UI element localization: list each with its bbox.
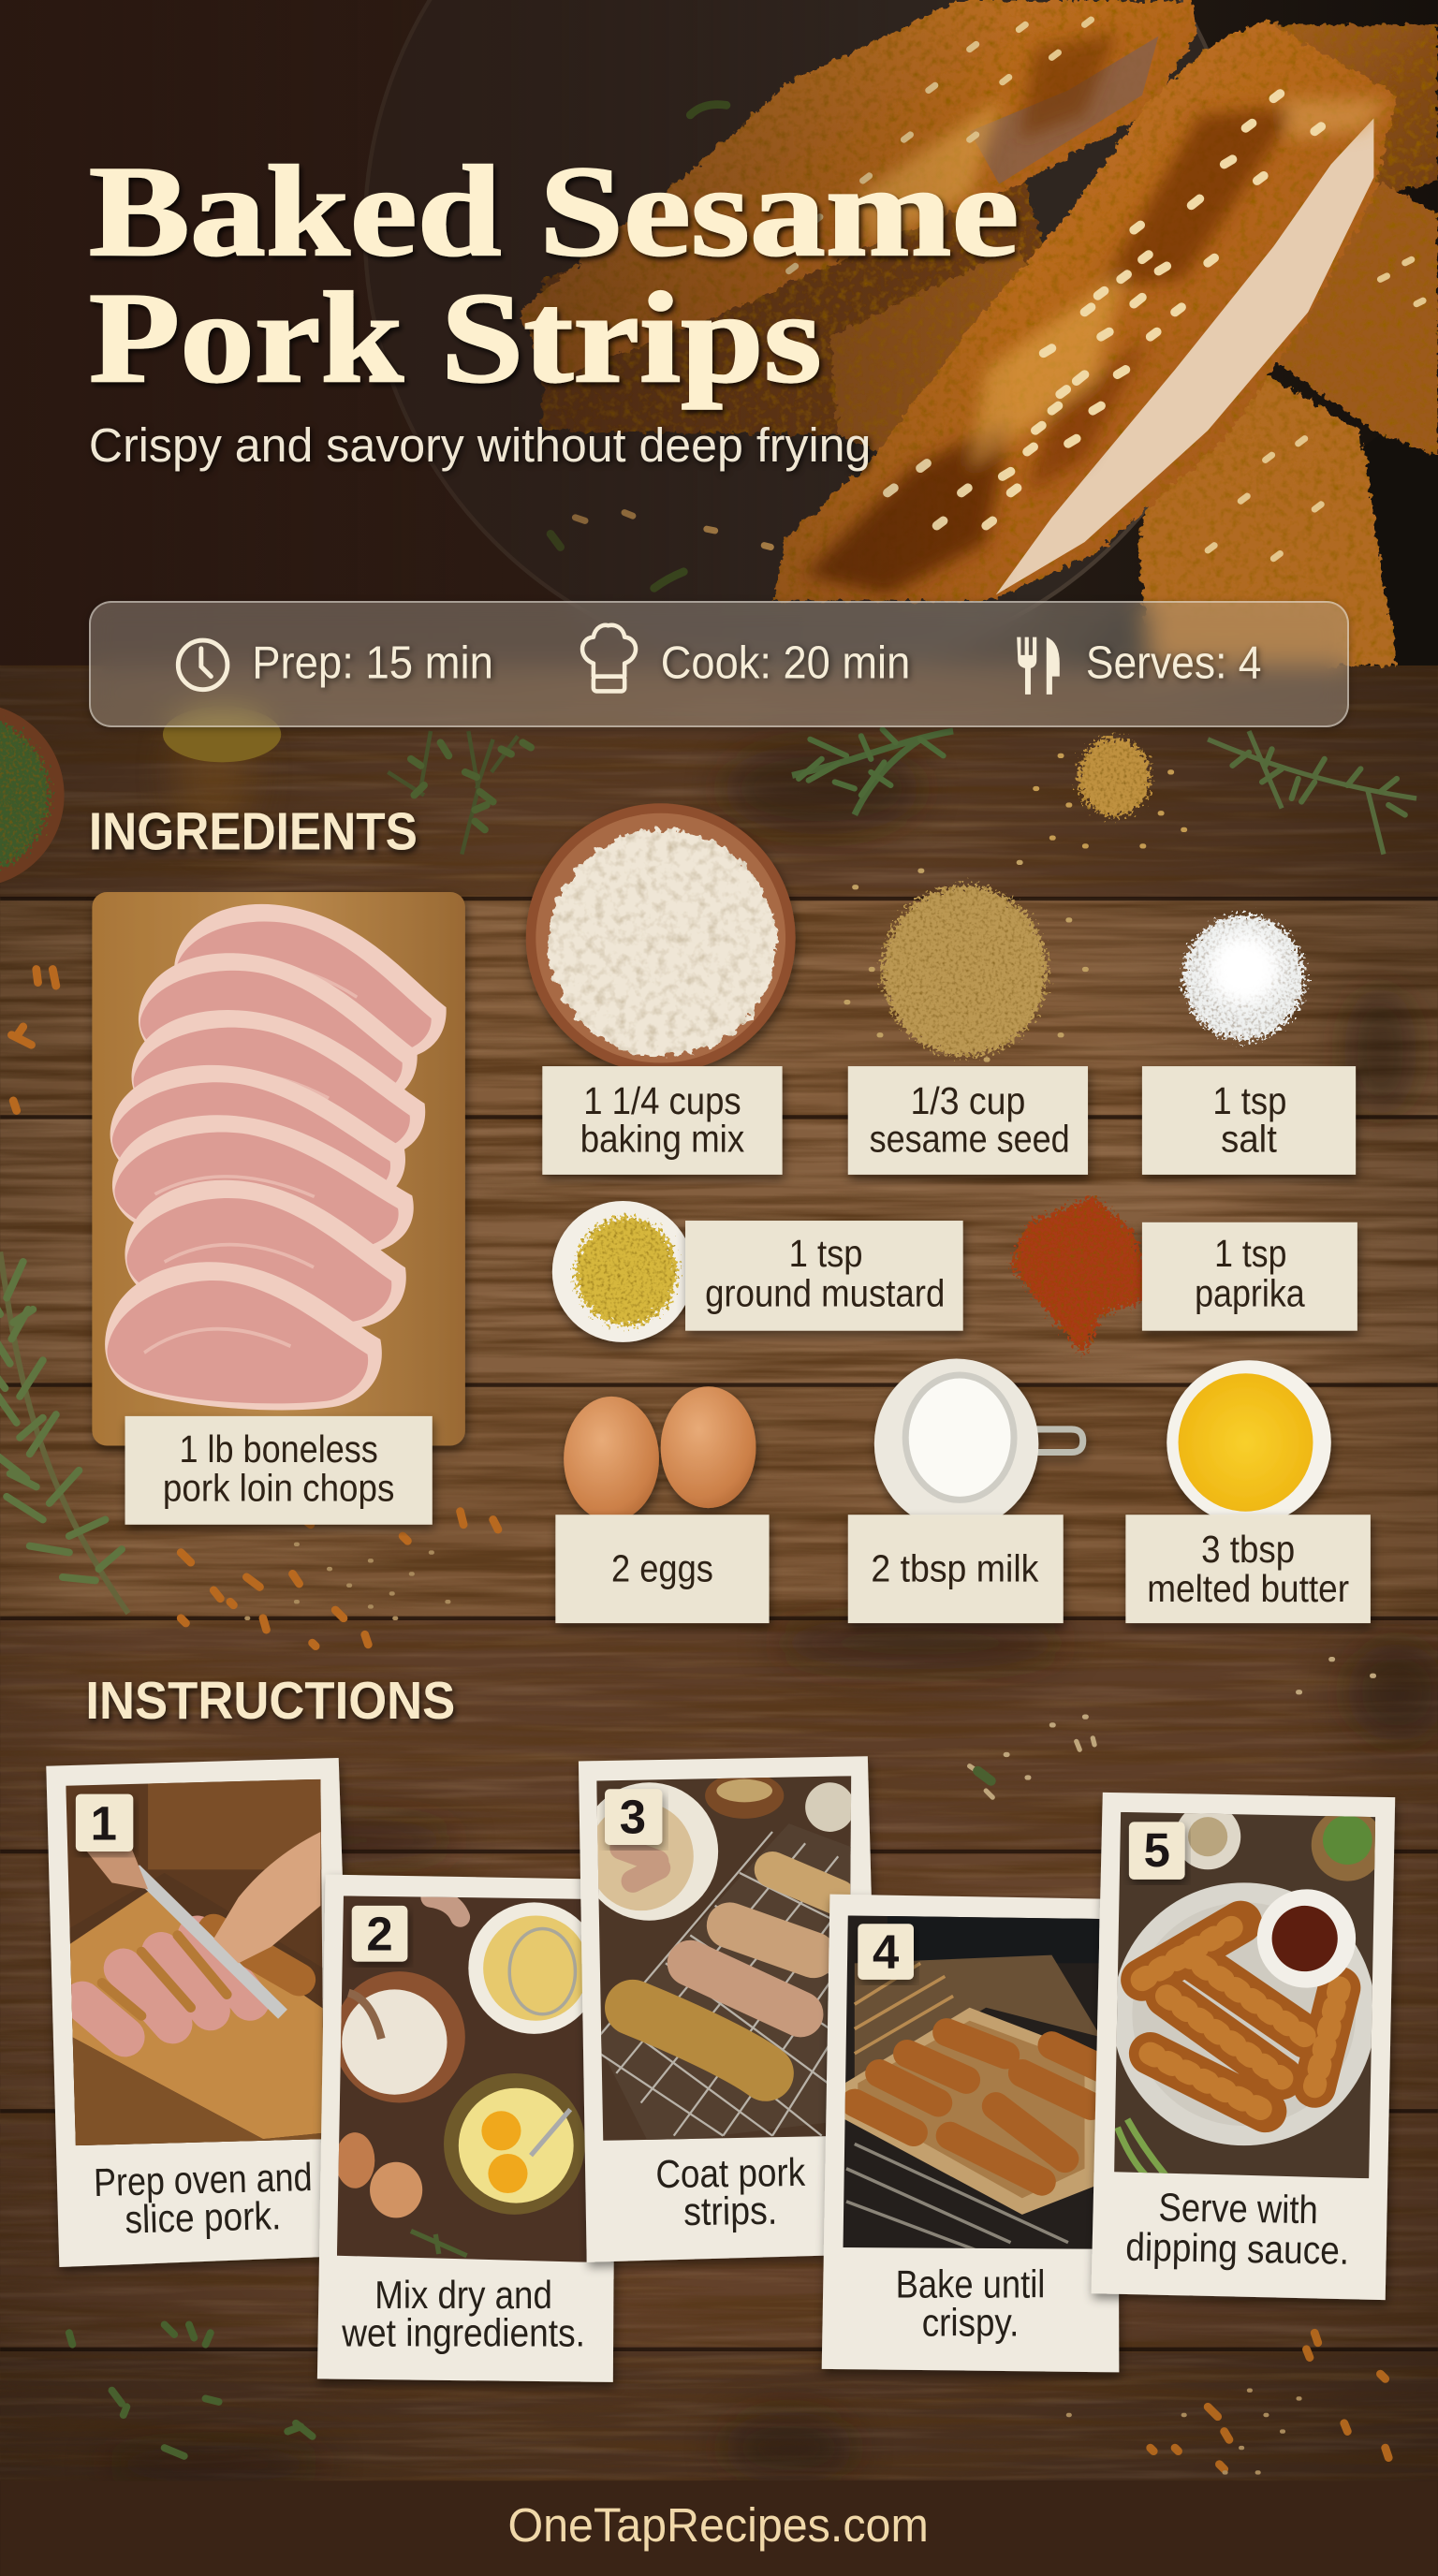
label: sesame seed <box>848 1066 1088 1175</box>
hero photo: sesame pork strips on a dark plate <box>0 0 1438 670</box>
label: eggs: 2 eggs <box>611 1546 713 1589</box>
photo: oven <box>838 1906 1105 2254</box>
caption: Bake until <box>896 2262 1045 2306</box>
icon: paprika pile <box>1011 1196 1155 1355</box>
ingredient: baking mix <box>526 803 796 1175</box>
caption <box>93 2155 313 2242</box>
badge: 1: 1 <box>91 1797 117 1851</box>
ingredient: pork loin chops on cutting board <box>92 880 465 1525</box>
badge: 4 <box>858 1924 914 1980</box>
label: milk: 2 tbsp milk <box>871 1546 1039 1589</box>
icon: cutting board <box>92 892 465 1445</box>
caption: Prep oven and <box>93 2155 313 2204</box>
step card 1 <box>46 1758 355 2267</box>
badge: 3 <box>605 1789 662 1845</box>
caption: wet ingredients. <box>341 2310 585 2354</box>
label: melted butter: 3 tbsp <box>1201 1528 1295 1571</box>
table scatter: crumbs and herbs below cards <box>69 1660 1388 2472</box>
label: paprika <box>1142 1222 1357 1331</box>
caption: Serve with <box>1158 2185 1318 2232</box>
label: sesame seed: 1/3 cup <box>910 1079 1025 1122</box>
label: pork: 1 lb boneless <box>179 1427 378 1471</box>
badge: 5 <box>1129 1822 1185 1880</box>
step card 5 <box>1092 1793 1395 2300</box>
caption: Mix dry and <box>374 2273 552 2317</box>
label: paprika: paprika <box>1195 1271 1305 1314</box>
label: salt: salt <box>1221 1117 1277 1160</box>
footer: OneTapRecipes.com <box>507 2498 929 2552</box>
label: pork: pork loin chops <box>163 1466 394 1509</box>
step card 2 <box>317 1875 616 2382</box>
ingredient: sesame seed <box>846 862 1088 1175</box>
footer <box>0 2481 1438 2576</box>
label: baking mix <box>542 1066 783 1175</box>
prep time: Prep: 15 min <box>252 637 493 688</box>
caption <box>896 2262 1045 2345</box>
ingredient: milk <box>848 1358 1083 1623</box>
label: salt: 1 tsp <box>1212 1079 1286 1122</box>
photo: mixing <box>337 1895 587 2262</box>
label: pork <box>125 1416 433 1525</box>
ingredient: melted butter <box>1125 1360 1371 1623</box>
title <box>89 139 1019 409</box>
icon: chef hat <box>582 625 636 691</box>
icon: milk jug <box>874 1358 1083 1530</box>
photo: served with dipping sauce <box>1109 1804 1384 2185</box>
icon: salt pile <box>1183 915 1305 1040</box>
label: baking mix: baking mix <box>580 1117 744 1160</box>
icon: flour bowl <box>526 803 796 1073</box>
ingredient: salt <box>1142 915 1356 1175</box>
ingredient: eggs <box>555 1386 770 1623</box>
step card 4 <box>822 1895 1119 2372</box>
table decorations: herbs, oil, spices <box>0 703 1416 1647</box>
icon: fork and knife <box>1017 637 1060 695</box>
title: Baked Sesame <box>89 139 1019 283</box>
info bar: prep, cook, serves <box>89 601 1349 727</box>
subtitle: Crispy and savory without deep frying <box>89 418 871 472</box>
caption: dipping sauce. <box>1125 2225 1350 2273</box>
label: salt <box>1142 1066 1356 1175</box>
label: sesame seed: sesame seed <box>870 1117 1070 1160</box>
label: melted butter <box>1125 1515 1371 1623</box>
label: eggs <box>555 1515 770 1623</box>
label: melted butter: melted butter <box>1147 1567 1349 1610</box>
section heading: ingredients: INGREDIENTS <box>89 801 418 860</box>
caption: Coat pork <box>655 2150 806 2196</box>
label: ground mustard <box>685 1221 963 1331</box>
caption: strips. <box>683 2188 778 2233</box>
caption <box>341 2273 585 2354</box>
label: ground mustard: 1 tsp <box>789 1232 863 1275</box>
caption: slice pork. <box>125 2193 282 2242</box>
section heading: instructions: INSTRUCTIONS <box>85 1671 455 1730</box>
icon: clock <box>178 640 227 690</box>
icon: butter bowl <box>1167 1360 1331 1525</box>
badge: 4: 4 <box>873 1925 900 1979</box>
caption: crispy. <box>922 2301 1019 2345</box>
serves: Serves: 4 <box>1086 637 1261 688</box>
caption <box>1125 2185 1350 2273</box>
label: milk <box>848 1515 1064 1623</box>
background: wooden table <box>0 666 1438 2484</box>
photo: coating on rack <box>596 1776 852 2141</box>
label: baking mix: 1 1/4 cups <box>583 1079 741 1122</box>
badge: 3: 3 <box>620 1791 646 1844</box>
ingredient: ground mustard <box>552 1201 963 1342</box>
icon: sesame pile <box>846 862 1086 1060</box>
icon: two eggs <box>564 1386 756 1521</box>
caption <box>655 2150 806 2233</box>
icon: mustard bowl <box>552 1201 694 1342</box>
badge: 1 <box>76 1794 133 1852</box>
cook time: Cook: 20 min <box>661 637 910 688</box>
title: Pork Strips <box>89 265 822 409</box>
label: ground mustard: ground mustard <box>705 1271 945 1314</box>
badge: 2 <box>352 1906 407 1962</box>
step card 3 <box>579 1756 881 2262</box>
badge: 5: 5 <box>1144 1823 1170 1877</box>
ingredient: paprika <box>1011 1196 1357 1355</box>
label: paprika: 1 tsp <box>1214 1232 1286 1275</box>
photo: slicing pork <box>59 1779 330 2152</box>
badge: 2: 2 <box>366 1907 393 1960</box>
